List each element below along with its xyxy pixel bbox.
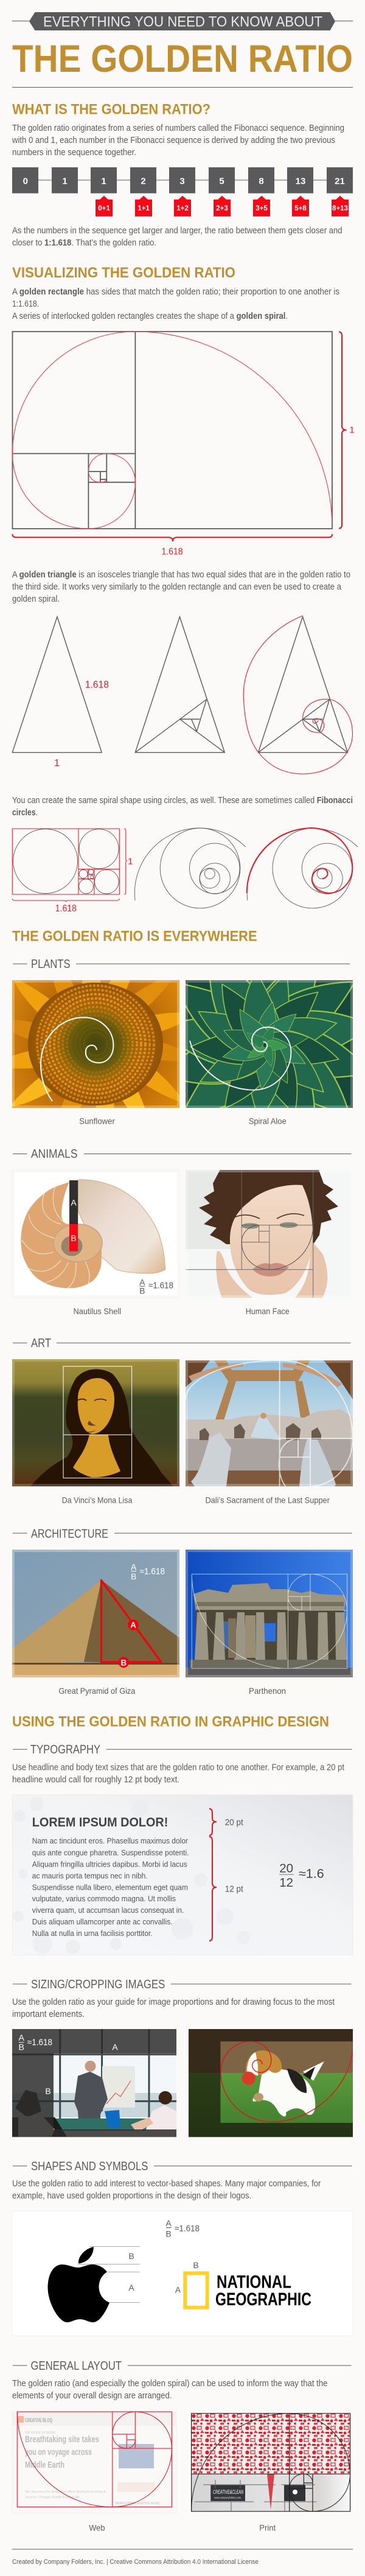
body sample: viverra quam, ut accumsan lacus consequat in. bbox=[32, 1906, 184, 1915]
Fibonacci circles in rectangles: 1.618 bbox=[55, 903, 77, 914]
headline sample: LOREM IPSUM DOLOR! bbox=[32, 1815, 168, 1829]
footer credit: Created by Company Folders, Inc. | Creative Commons Attribution 4.0 International License bbox=[12, 2558, 259, 2566]
intro text: with 0 and 1, each number in the Fibonacci sequence is derived by adding the two previous bbox=[12, 136, 335, 145]
Fibonacci sequence diagram: 13 bbox=[296, 176, 305, 187]
photo: business presentation bbox=[12, 2029, 176, 2137]
shapes text: example, have used golden proportions in the design of their logos. bbox=[12, 2191, 251, 2201]
Fibonacci sequence diagram: 1 bbox=[62, 176, 68, 187]
photo: puppy with spiral bbox=[189, 2029, 353, 2137]
golden triangle text: golden spiral. bbox=[12, 594, 60, 604]
photo: business presentation: A bbox=[112, 2042, 118, 2052]
golden rectangle text: 1:1.618. bbox=[12, 299, 39, 309]
photo: Dali's Sacrament of the Last Supper bbox=[186, 1360, 353, 1494]
size labels: 20 pt bbox=[225, 1818, 243, 1828]
photo: Great Pyramid of Giza: ≈1.618 bbox=[140, 1566, 165, 1576]
Fibonacci sequence diagram: 5 bbox=[219, 176, 224, 187]
example: web layout: We discover the detail and effort deployed to bring A bbox=[25, 2490, 106, 2494]
example: print layout bbox=[189, 2411, 353, 2514]
caption: spiral aloe: Spiral Aloe bbox=[249, 1116, 287, 1126]
golden rectangle text: A golden rectangle has sides that match the golden ratio; their proportion to one another is bbox=[12, 287, 339, 297]
icon: National Geographic logo: A bbox=[175, 2285, 181, 2294]
subheading: animals: ANIMALS bbox=[31, 1147, 78, 1161]
crop overlay bbox=[12, 2029, 176, 2137]
typography text bbox=[12, 1763, 344, 1784]
photo: Mona Lisa bbox=[12, 1359, 179, 1486]
icon: National Geographic logo bbox=[175, 2260, 311, 2310]
photo: Great Pyramid of Giza: A bbox=[131, 1562, 137, 1572]
caption: print: Print bbox=[259, 2523, 276, 2533]
golden triangle with spiral bbox=[243, 616, 352, 774]
Fibonacci sequence diagram: 5+8 bbox=[294, 205, 307, 212]
heading: visualizing: VISUALIZING THE GOLDEN RATIO bbox=[12, 265, 235, 281]
golden triangle plain bbox=[12, 617, 109, 768]
Fibonacci sequence diagram: 0 bbox=[23, 176, 28, 187]
example: web layout bbox=[12, 2412, 176, 2513]
Fibonacci sequence diagram: 0+1 bbox=[98, 205, 110, 212]
caption: human face: Human Face bbox=[246, 1306, 290, 1316]
golden triangle subdivided bbox=[135, 617, 224, 753]
caption: Great Pyramid: Great Pyramid of Giza bbox=[58, 1686, 136, 1696]
photo: nautilus shell: ≈1.618 bbox=[148, 1281, 173, 1291]
caption: Mona Lisa: Da Vinci’s Mona Lisa bbox=[62, 1495, 133, 1505]
photo: spiral aloe bbox=[186, 980, 353, 1108]
Fibonacci sequence diagram: 1 bbox=[101, 176, 106, 187]
golden rectangle with spiral bbox=[12, 332, 355, 557]
body sample: Duis aliquam ullamcorper ante ac convallis. bbox=[32, 1917, 173, 1926]
sizing text: Use the golden ratio as your guide for image proportions and for drawing focus to the most bbox=[12, 1997, 335, 2007]
photo: Great Pyramid of Giza: A bbox=[130, 1621, 136, 1630]
Fibonacci sequence diagram: 8 bbox=[259, 176, 264, 187]
photo: business presentation: ≈1.618 bbox=[27, 2037, 52, 2047]
example: web layout: CREATIVE BLOQ bbox=[25, 2417, 52, 2424]
photo: business presentation: A bbox=[19, 2033, 25, 2042]
Fibonacci sequence diagram: 3 bbox=[179, 176, 185, 187]
example: web layout: Breathtaking site takes bbox=[25, 2434, 99, 2445]
size labels: 12 pt bbox=[225, 1885, 243, 1895]
golden rectangle text: A series of interlocked golden rectangles creates the shape of a golden spiral. bbox=[12, 312, 288, 321]
Fibonacci circles in rectangles bbox=[12, 829, 133, 914]
intro text: numbers in the sequence together. bbox=[12, 148, 136, 158]
size labels bbox=[225, 1818, 243, 1895]
body sample: quis ante congue pharetra. Suspendisse potenti. bbox=[32, 1848, 189, 1857]
sizing text: important elements. bbox=[12, 2010, 85, 2019]
golden rectangle text bbox=[12, 287, 339, 321]
body sample: vulputate, varius commodo magna. Ut mollis bbox=[32, 1894, 176, 1903]
Fibonacci sequence diagram: 2 bbox=[141, 176, 146, 187]
ratio label bbox=[165, 2218, 200, 2239]
icon: National Geographic logo: NATIONAL bbox=[217, 2272, 291, 2292]
heading: everywhere: THE GOLDEN RATIO IS EVERYWHERE bbox=[12, 928, 257, 945]
example: web layout: WEB DESIGN | SHOWCASE bbox=[25, 2431, 56, 2435]
Fibonacci sequence diagram: 2+3 bbox=[216, 205, 228, 212]
photo: Great Pyramid of Giza bbox=[12, 1550, 179, 1677]
subheading: architecture: ARCHITECTURE bbox=[31, 1527, 108, 1540]
Fibonacci circles in rectangles: 1 bbox=[128, 857, 133, 866]
header banner: EVERYTHING YOU NEED TO KNOW ABOUT bbox=[43, 13, 322, 30]
Fibonacci sequence diagram: 1+2 bbox=[176, 205, 189, 212]
caption: Dali: Dali’s Sacrament of the Last Supper bbox=[205, 1495, 330, 1505]
ratio text bbox=[12, 226, 342, 248]
icon: apple logo bbox=[47, 2246, 140, 2322]
photo: business presentation: B bbox=[45, 2086, 51, 2096]
spiral of circles with red spiral bbox=[247, 828, 358, 908]
photo: Great Pyramid of Giza: B bbox=[120, 1658, 127, 1667]
body sample: Aliquam fringilla ultricies dapibus. Morbi id lacus bbox=[32, 1859, 187, 1868]
shapes text: Use the golden ratio to add interest to vector-based shapes. Many major companies, for bbox=[12, 2179, 321, 2189]
icon: apple logo: A bbox=[128, 2283, 134, 2292]
Fibonacci sequence diagram: 3+5 bbox=[255, 205, 268, 212]
caption: nautilus shell: Nautilus Shell bbox=[73, 1306, 121, 1316]
caption: web: Web bbox=[89, 2523, 105, 2533]
ratio text: closer to 1:1.618. That’s the golden ratio. bbox=[12, 238, 156, 248]
photo: nautilus shell: A bbox=[139, 1278, 145, 1287]
Fibonacci sequence diagram bbox=[12, 167, 353, 217]
photo: nautilus shell bbox=[12, 1170, 179, 1298]
photo: sunflower bbox=[12, 980, 179, 1108]
shapes text bbox=[12, 2179, 321, 2201]
icon: National Geographic logo: GEOGRAPHIC bbox=[215, 2289, 311, 2310]
photo: human face bbox=[186, 1170, 353, 1298]
body sample bbox=[32, 1836, 189, 1938]
golden triangle plain: 1 bbox=[54, 758, 60, 768]
photo: nautilus shell: B bbox=[71, 1233, 77, 1243]
heading: using the golden ratio: USING THE GOLDEN RATIO IN GRAPHIC DESIGN bbox=[12, 1713, 329, 1730]
panel: logos bbox=[12, 2211, 353, 2336]
ratio fraction: 20 bbox=[279, 1861, 293, 1875]
example: print layout: CREATIVE&CLEAN bbox=[213, 2489, 243, 2496]
example: print layout: www.companyfolders.com bbox=[214, 2496, 241, 2500]
icon: National Geographic logo: B bbox=[193, 2260, 199, 2270]
photo: nautilus shell: A bbox=[71, 1198, 77, 1208]
golden rectangle with spiral: 1 bbox=[349, 425, 355, 436]
body sample: ac mauris porta tempus nec in nibh. bbox=[32, 1871, 148, 1880]
panel: typography example bbox=[12, 1795, 353, 1955]
Fibonacci sequence diagram: 21 bbox=[335, 176, 345, 187]
layout text: The golden ratio (and especially the golden spiral) can be used to inform the way that the bbox=[12, 2379, 327, 2389]
layout text: elements of your overall design are arranged. bbox=[12, 2391, 172, 2401]
golden triangle text bbox=[12, 570, 350, 604]
golden triangle plain: 1.618 bbox=[85, 678, 109, 690]
subheading: sizing/cropping images: SIZING/CROPPING IMAGES bbox=[31, 1978, 165, 1991]
Fibonacci sequence diagram: 8+13 bbox=[332, 205, 348, 212]
subheading: art: ART bbox=[31, 1337, 51, 1350]
subheading: shapes and symbols: SHAPES AND SYMBOLS bbox=[31, 2160, 148, 2173]
Fibonacci sequence diagram: 1+1 bbox=[137, 205, 150, 212]
body sample: Nulla at nulla in urna facilisis porttitor. bbox=[32, 1929, 153, 1938]
icon: apple logo: B bbox=[128, 2251, 134, 2261]
sizing text bbox=[12, 1997, 335, 2019]
Fibonacci circles text: circles. bbox=[12, 808, 38, 818]
subheading: general layout: GENERAL LAYOUT bbox=[30, 2359, 122, 2373]
golden rectangle with spiral: 1.618 bbox=[162, 546, 182, 557]
example: web layout: Middle Earth bbox=[25, 2460, 64, 2470]
body sample: Suspendisse nulla libero, elementum eget quam bbox=[32, 1882, 188, 1892]
example: web layout: you on voyage across bbox=[25, 2447, 92, 2457]
Fibonacci circles text: You can create the same spiral shape using circles, as well. These are sometimes called Fibonacci bbox=[12, 796, 353, 806]
spiral of circles bbox=[134, 828, 246, 908]
subheading: plants: PLANTS bbox=[31, 958, 71, 971]
body sample: Nam ac tincidunt eros. Phasellus maximus dolor bbox=[32, 1836, 189, 1845]
ratio label: A bbox=[165, 2218, 172, 2228]
ratio fraction: 12 bbox=[279, 1876, 293, 1890]
example: web layout: Journey Through Middle Earth to life bbox=[25, 2496, 80, 2499]
Fibonacci circles text bbox=[12, 796, 353, 818]
ratio fraction: ≈1.6 bbox=[299, 1867, 324, 1881]
example: web layout: MORE FROM CREATIVE BLOQ bbox=[116, 2502, 160, 2505]
ratio fraction bbox=[279, 1861, 324, 1890]
photo: nautilus shell: B bbox=[139, 1286, 145, 1296]
caption: Parthenon: Parthenon bbox=[249, 1686, 286, 1696]
intro text bbox=[12, 124, 344, 158]
caption: sunflower: Sunflower bbox=[79, 1116, 115, 1126]
layout text bbox=[12, 2379, 327, 2401]
heading: what is the golden ratio: WHAT IS THE GOLDEN RATIO? bbox=[12, 102, 210, 118]
subheading: typography: TYPOGRAPHY bbox=[30, 1743, 100, 1756]
braces bbox=[209, 1809, 217, 1941]
photo: Great Pyramid of Giza: B bbox=[131, 1572, 136, 1581]
photo: Parthenon bbox=[186, 1550, 353, 1677]
photo: business presentation: B bbox=[19, 2042, 24, 2052]
typography text: headline would call for roughly 12 pt body text. bbox=[12, 1775, 179, 1784]
ratio label: ≈1.618 bbox=[175, 2223, 200, 2233]
ratio label: B bbox=[165, 2229, 172, 2239]
